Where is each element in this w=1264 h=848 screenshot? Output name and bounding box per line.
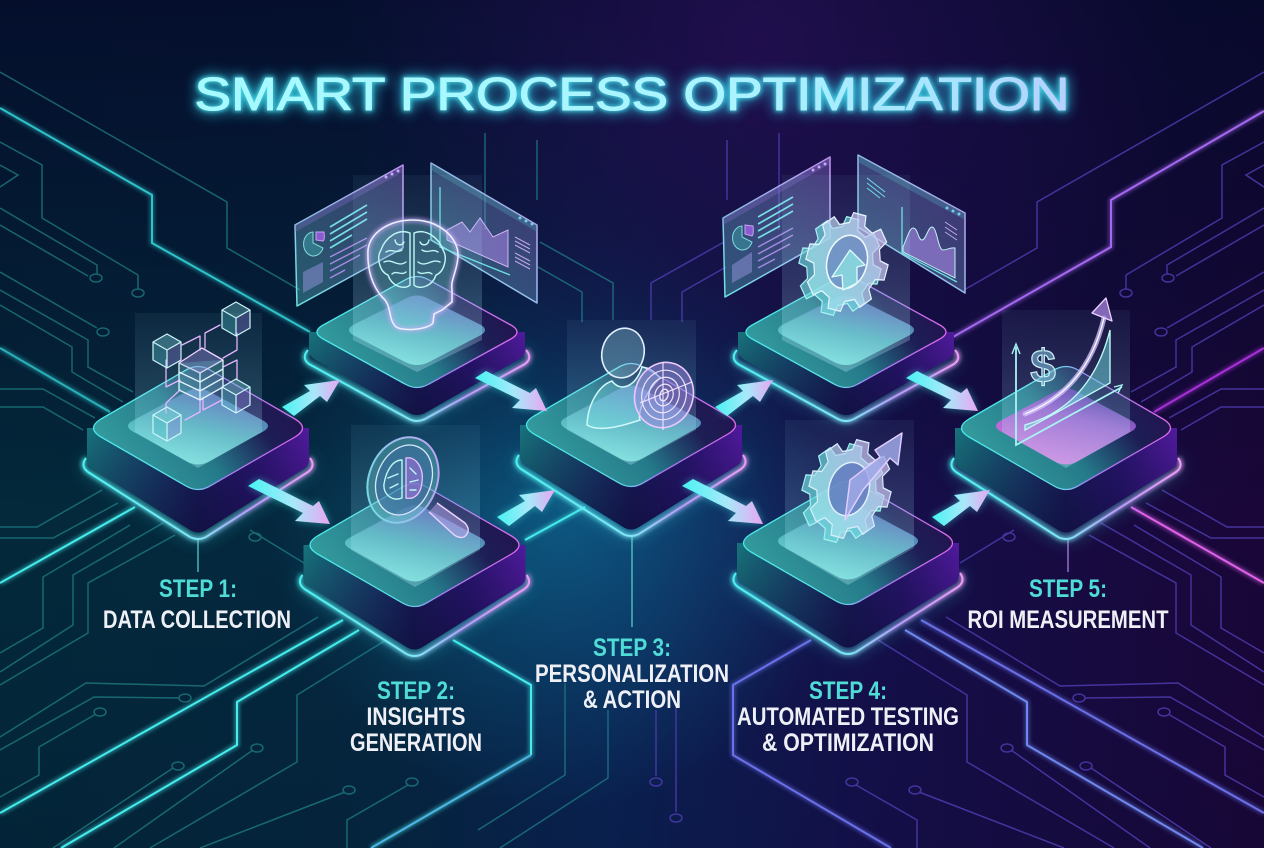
arrow: step 3 to step 4 <box>682 479 763 524</box>
label: step 3: STEP 3: <box>593 634 671 662</box>
label: step 3: & ACTION <box>583 686 681 714</box>
label: step 3: PERSONALIZATION <box>535 660 729 688</box>
stem lines <box>198 537 1068 627</box>
title: SMART PROCESS OPTIMIZATION <box>194 68 1070 120</box>
bright violet and magenta traces <box>733 111 1264 848</box>
panel: right chart <box>858 155 965 293</box>
platform: step 4 automated testing <box>733 420 963 654</box>
arrow glow <box>248 371 990 526</box>
arrow: step 3 to upper right <box>715 380 773 416</box>
platform: step 1 data collection <box>83 302 313 539</box>
platform: upper right gear <box>723 155 965 421</box>
label: step 2: STEP 2: <box>377 677 455 705</box>
icon: data network <box>153 302 250 441</box>
label: step 2 <box>350 677 482 757</box>
label: step 1 <box>103 575 291 634</box>
platform: upper left brain <box>295 163 537 421</box>
arrow: step 4 to step 5 <box>932 490 990 526</box>
platform: step 3 personalization <box>516 320 746 536</box>
icon: person with target <box>587 323 702 435</box>
icon: ROI growth chart <box>1012 298 1122 445</box>
platform: step 2 insights generation <box>300 425 529 656</box>
icon: ROI growth chart: $ <box>1030 340 1056 392</box>
icon: gear with rising arrow <box>791 431 902 551</box>
panel: left dashboard <box>295 165 403 306</box>
label: step 1: DATA COLLECTION <box>103 606 291 634</box>
circuit traces: dim left <box>0 72 613 848</box>
bright cyan traces <box>0 108 585 848</box>
label: step 3 <box>535 634 729 714</box>
title: SMART PROCESS OPTIMIZATION <box>194 68 1070 120</box>
icon: gear with up arrow <box>788 204 899 324</box>
panel: left dashboard <box>723 157 830 297</box>
arrow: upper right to step 5 <box>906 371 978 411</box>
label: step 1: STEP 1: <box>159 575 237 603</box>
icon: magnifier with brain <box>355 426 468 538</box>
label: step 4 <box>737 677 959 757</box>
label: step 5: STEP 5: <box>1029 575 1107 603</box>
panel: right chart <box>431 163 537 303</box>
label: step 4: & OPTIMIZATION <box>762 729 934 757</box>
label: step 5 <box>968 575 1168 634</box>
arrow: step 1 to step 2 <box>248 479 330 524</box>
arrows between steps <box>248 371 990 526</box>
label: step 4: STEP 4: <box>809 677 887 705</box>
title: SMART PROCESS OPTIMIZATION <box>194 68 1070 120</box>
arrow: upper to step 3 <box>475 371 547 411</box>
label: step 4: AUTOMATED TESTING <box>737 703 959 731</box>
label: step 5: ROI MEASUREMENT <box>968 606 1168 634</box>
arrow: step 2 to step 3 <box>497 490 555 526</box>
label: step 2: GENERATION <box>350 729 482 757</box>
arrow: step 1 to upper <box>282 380 340 416</box>
circuit traces: dim right <box>650 72 1264 848</box>
icon: brain in head <box>368 220 458 330</box>
label: step 2: INSIGHTS <box>366 703 466 731</box>
platform: step 5 roi measurement <box>951 298 1181 539</box>
